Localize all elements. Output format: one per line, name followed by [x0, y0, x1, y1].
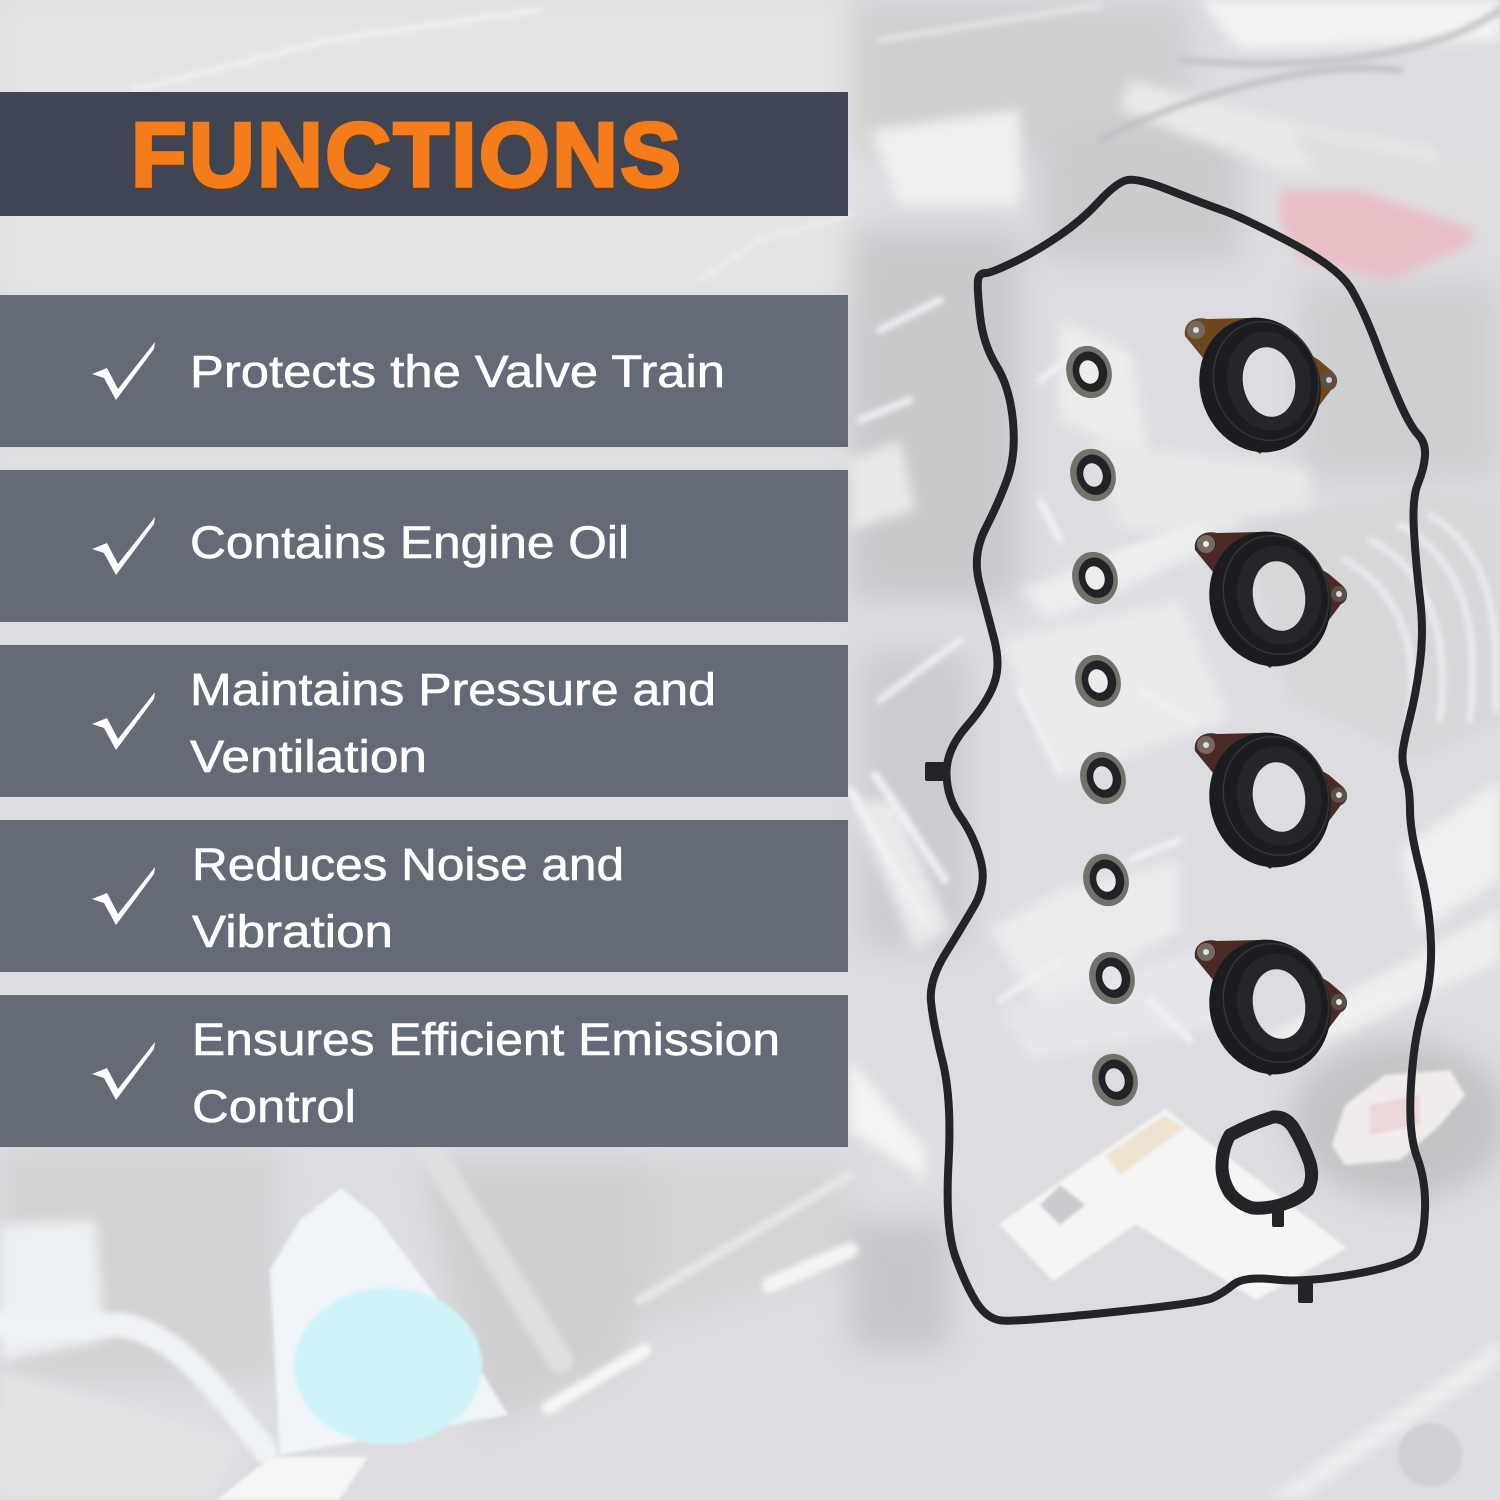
valve cover gasket product [925, 180, 1431, 1321]
panel: reduces noise and vibration [0, 820, 848, 972]
icon: check mark [92, 692, 155, 750]
title text: FUNCTIONS [131, 106, 681, 208]
triangular seal [1222, 1117, 1312, 1227]
icon: check mark [92, 1042, 155, 1100]
icon: check mark [92, 517, 155, 575]
text: ensures efficient emission control [192, 1014, 780, 1132]
text: ensures efficient emission control: Ensures Efficient Emission [192, 1014, 780, 1065]
title text: FUNCTIONS [131, 105, 681, 206]
text: reduces noise and vibration: Reduces Noise and [192, 839, 624, 890]
gasket outer ring [931, 180, 1431, 1321]
panel: maintains pressure and ventilation [0, 645, 848, 797]
icon: check mark [92, 342, 155, 400]
large spark plug tube seal 3 [1193, 717, 1347, 883]
icon: check mark [92, 867, 155, 925]
large spark plug tube seal 2 [1193, 516, 1347, 682]
large spark plug tube seal 4 [1193, 924, 1347, 1090]
intake bellows stripes [1345, 515, 1496, 720]
text: maintains pressure and ventilation [190, 664, 716, 782]
small seal rings [1059, 340, 1145, 1112]
text: ensures efficient emission control: Control [192, 1081, 356, 1132]
mottled engine detail [860, 300, 1400, 1040]
text: maintains pressure and ventilation: Ventilation [190, 731, 427, 782]
panel: ensures efficient emission control [0, 995, 848, 1147]
panel: protects the valve train [0, 295, 848, 447]
text: maintains pressure and ventilation: Maintains Pressure and [190, 664, 716, 715]
title banner [0, 92, 848, 216]
intake tube stripes [850, 775, 945, 920]
text: reduces noise and vibration: Vibration [192, 906, 393, 957]
panel: contains engine oil [0, 470, 848, 622]
text: protects the valve train: Protects the Valve Train [190, 346, 725, 397]
text: contains engine oil: Contains Engine Oil [190, 517, 629, 568]
text: reduces noise and vibration [192, 839, 624, 957]
large spark plug tube seal 1 [1183, 302, 1337, 468]
gasket tabs [925, 762, 1313, 1303]
